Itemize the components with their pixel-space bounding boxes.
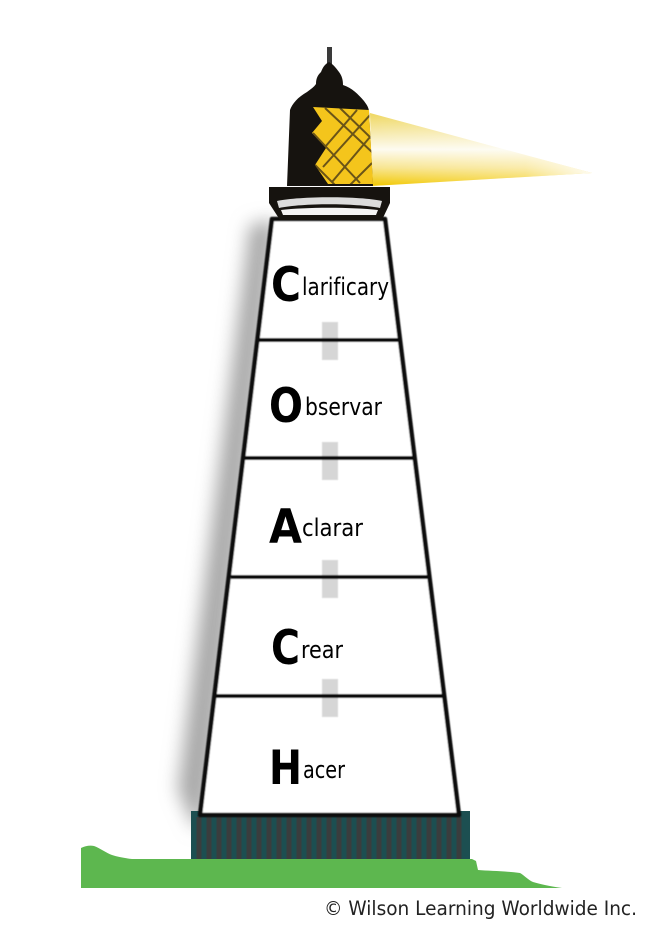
label: Aclarar: clarar	[302, 514, 363, 542]
label: Hacer: acer	[303, 756, 345, 784]
label: Observar	[269, 379, 382, 434]
dome	[287, 62, 373, 186]
lighthouse base	[191, 811, 470, 859]
tower shadow	[178, 220, 276, 830]
label: Hacer	[269, 741, 345, 796]
spire	[327, 47, 332, 67]
beam of light	[370, 113, 592, 186]
label: Clarificary: larificary	[302, 273, 389, 301]
label: Hacer: H	[269, 741, 302, 796]
label: Clarificary: C	[271, 258, 301, 313]
label: Aclarar	[269, 500, 363, 555]
gallery	[269, 187, 390, 220]
label: Crear: rear	[301, 636, 343, 664]
ground	[81, 846, 562, 888]
label: Clarificary	[271, 258, 389, 313]
lantern room	[269, 47, 390, 220]
label: Observar: bservar	[305, 393, 382, 421]
label: Aclarar: A	[269, 500, 303, 555]
lighthouse tower	[200, 219, 459, 815]
label: Observar: O	[269, 379, 303, 434]
window	[312, 107, 373, 184]
ladder marks	[322, 322, 338, 717]
label: Crear	[271, 621, 343, 676]
copyright: © Wilson Learning Worldwide Inc.	[324, 897, 637, 920]
label: Crear: C	[271, 621, 300, 676]
